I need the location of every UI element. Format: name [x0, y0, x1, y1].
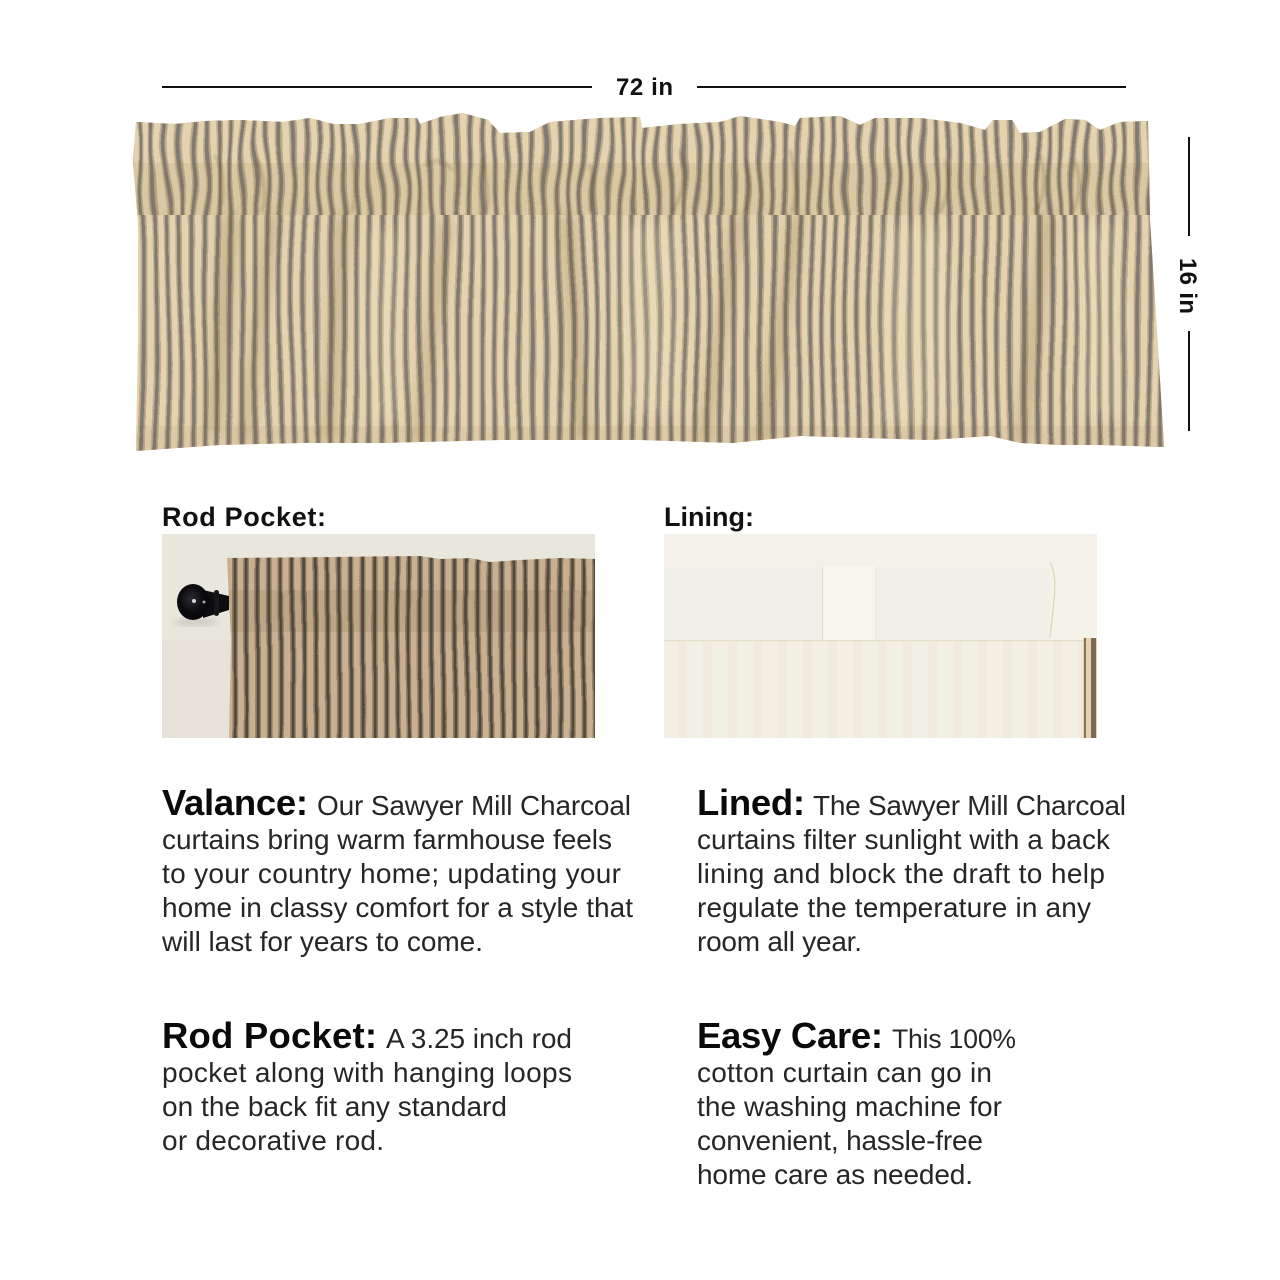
- text block: Easy Care: [697, 1015, 1016, 1190]
- photo: white lining: [664, 534, 1097, 738]
- heading: rod pocket photo label: Rod Pocket:: [162, 502, 326, 532]
- text block: Rod Pocket: on the back fit any standard: [162, 1091, 507, 1122]
- text block: Valance: home in classy comfort for a style that: [162, 892, 633, 923]
- heading: lining photo label: Lining:: [664, 502, 754, 532]
- text block: Easy Care: cotton curtain can go in: [697, 1057, 992, 1088]
- icon: black rod finial: [174, 584, 229, 626]
- curtain valance photo: [133, 113, 1164, 451]
- text block: Easy Care: home care as needed.: [697, 1159, 973, 1190]
- hanging loop: [822, 566, 876, 640]
- text block: Valance: Valance:: [162, 782, 308, 823]
- text block: Easy Care: This 100%: [892, 1024, 1016, 1054]
- text block: Rod Pocket: pocket along with hanging loops: [162, 1057, 572, 1088]
- text block: Lined: lining and block the draft to help: [697, 858, 1105, 889]
- text block: Valance: will last for years to come.: [161, 926, 483, 957]
- text block: Easy Care: the washing machine for: [697, 1091, 1002, 1122]
- text block: Lined: [697, 782, 1126, 957]
- text block: Lined: Lined:: [697, 782, 805, 823]
- text block: Lined: regulate the temperature in any: [697, 892, 1091, 923]
- dimension: height 16 in: 16 in: [1174, 258, 1201, 314]
- text block: Rod Pocket: [162, 1015, 572, 1156]
- text block: Lined: curtains filter sunlight with a back: [697, 824, 1111, 855]
- side stripe: [1083, 638, 1097, 738]
- text block: Lined: The Sawyer Mill Charcoal: [813, 790, 1126, 821]
- text block: Valance: [161, 782, 633, 957]
- text block: Rod Pocket: or decorative rod.: [162, 1125, 384, 1156]
- text block: Valance: curtains bring warm farmhouse feels: [162, 824, 612, 855]
- text block: Lined: room all year.: [697, 926, 862, 957]
- text block: Rod Pocket: A 3.25 inch rod: [386, 1023, 572, 1054]
- text block: Rod Pocket: Rod Pocket:: [162, 1015, 377, 1056]
- text block: Easy Care: Easy Care:: [697, 1015, 883, 1056]
- text block: Easy Care: convenient, hassle-free: [697, 1125, 983, 1156]
- photo: rod pocket with finial: [162, 534, 610, 745]
- text block: Valance: Our Sawyer Mill Charcoal: [317, 790, 631, 821]
- dimension: width 72 in: 72 in: [616, 74, 673, 101]
- text block: Valance: to your country home; updating your: [162, 858, 621, 889]
